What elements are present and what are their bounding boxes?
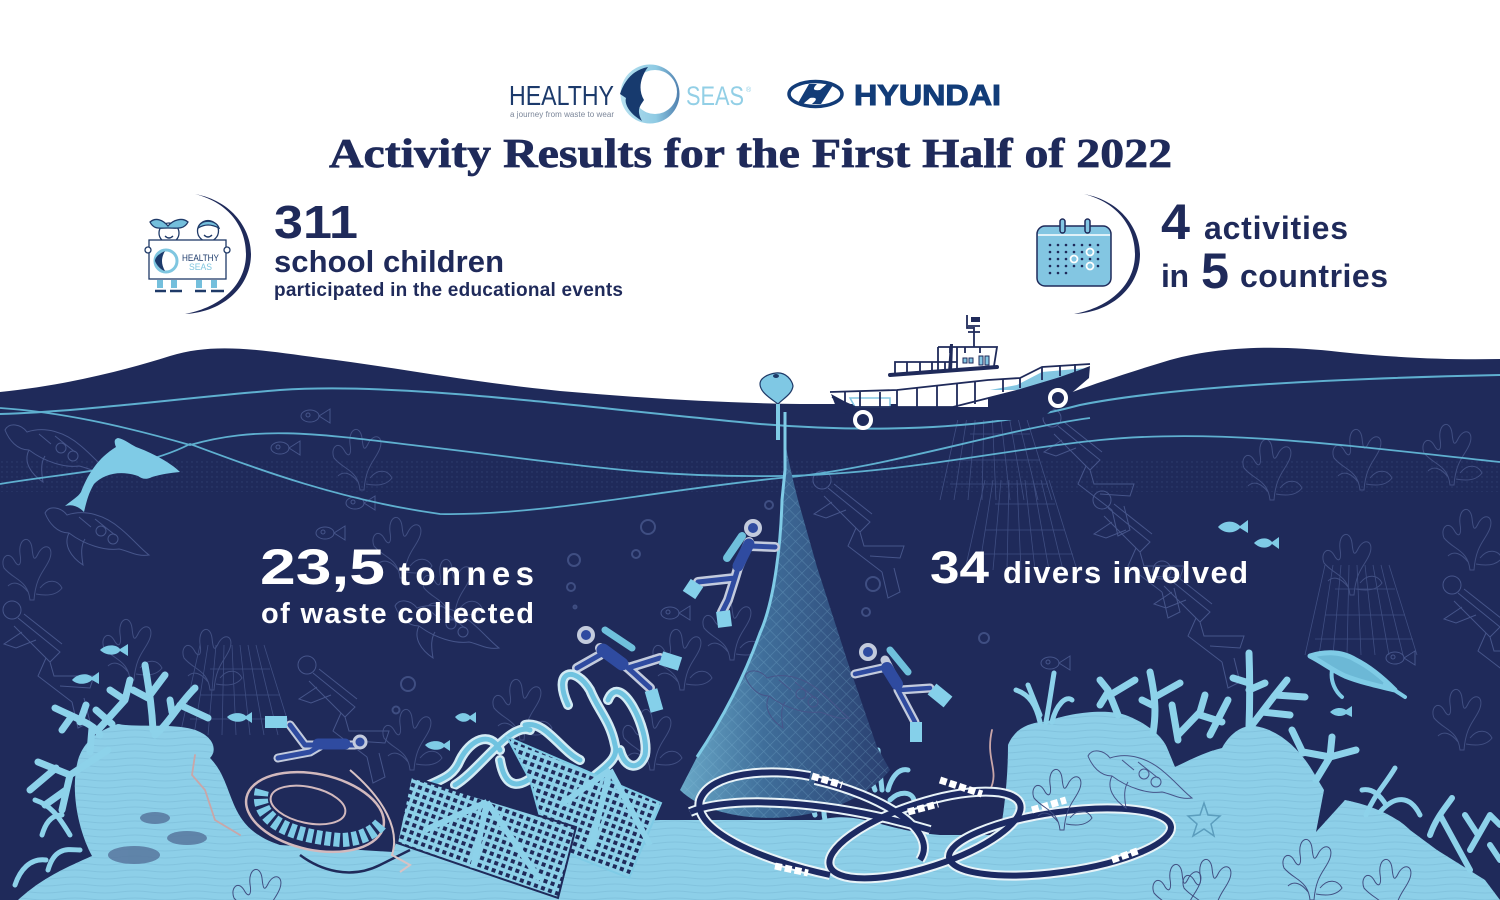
seabed	[18, 712, 1500, 900]
diver 1	[689, 521, 775, 627]
bubbles	[392, 501, 989, 714]
stat: 4 activities: 4	[1161, 194, 1190, 250]
net	[680, 412, 890, 818]
trap 2	[507, 737, 661, 878]
logo: Hyundai: HYUNDAI	[854, 80, 1001, 112]
panel: activities	[1037, 194, 1388, 314]
icon: crescent left	[185, 194, 251, 314]
buoy	[760, 373, 793, 440]
crew figure	[948, 344, 953, 372]
stat: in 5 countries: in	[1161, 258, 1189, 294]
stat: tonnes of waste: tonnes	[399, 555, 534, 592]
logo: Healthy Seas: SEAS	[686, 81, 744, 111]
logo: Healthy Seas	[509, 64, 752, 124]
coral: left cluster	[15, 665, 208, 885]
ropes	[192, 674, 994, 835]
panel: school children	[145, 194, 623, 314]
rope loops	[690, 772, 1175, 896]
background line art	[3, 409, 1500, 783]
lost net ring	[236, 756, 410, 872]
logo: Healthy Seas: a journey from waste to wear	[510, 110, 614, 119]
panel: school children: HEALTHY	[182, 253, 219, 263]
coral: right cluster	[1016, 653, 1500, 870]
title: Activity Results for the First Half of 2022	[329, 130, 1172, 176]
logo: Hyundai	[789, 80, 1001, 112]
stat: tonnes of waste: of waste collected	[261, 598, 534, 630]
logo: Healthy Seas: ®	[746, 86, 752, 94]
stat: divers: 34	[930, 542, 989, 593]
stat: tonnes of waste: 23,5	[260, 539, 385, 595]
stat: in 5 countries	[1161, 243, 1388, 299]
stat: in 5 countries: 5	[1201, 243, 1229, 299]
diver 4	[265, 722, 366, 758]
stat: 4 activities	[1161, 194, 1348, 250]
diver 2	[577, 628, 680, 711]
wave lines	[0, 375, 1500, 514]
fish group	[72, 520, 1352, 751]
panel: school children: SEAS	[189, 262, 212, 272]
stat: in 5 countries: countries	[1240, 258, 1388, 294]
icon: children holding sign	[145, 219, 230, 291]
stat: tonnes of waste	[260, 539, 534, 630]
windows	[963, 356, 989, 365]
stat: 4 activities: activities	[1204, 210, 1348, 246]
logo: Healthy Seas: HEALTHY	[509, 80, 614, 111]
rails	[830, 315, 1090, 407]
cabin	[897, 347, 995, 407]
net body	[680, 440, 890, 818]
stat: divers	[930, 542, 1248, 593]
foredeck	[990, 368, 1087, 390]
lifebuoys	[855, 412, 871, 428]
stern deck	[850, 398, 890, 407]
crab cluster	[108, 812, 207, 864]
ocean	[0, 348, 1500, 900]
radar	[971, 317, 980, 322]
icon: crescent right	[1074, 194, 1140, 314]
icon: turtle	[1310, 653, 1405, 697]
stat: divers: divers involved	[1003, 555, 1248, 590]
text: participated: participated in the educational events	[274, 280, 623, 301]
sand ripples	[18, 712, 1500, 900]
icon: starfish	[1188, 803, 1220, 836]
icon: calendar	[1037, 219, 1111, 286]
hull	[831, 366, 1090, 420]
roof deck	[890, 367, 997, 375]
dotted water band	[0, 460, 1500, 492]
coral: central tufts	[800, 750, 914, 820]
text: school children: school children	[274, 244, 504, 279]
net edge	[697, 412, 785, 757]
trap 1	[397, 777, 576, 898]
ghost coral on sand	[233, 751, 1422, 900]
stat: 311: 311	[274, 196, 358, 248]
ghost turtle on net	[745, 671, 849, 728]
diver 3	[855, 645, 948, 742]
boat	[830, 315, 1090, 428]
icon: dolphin	[65, 438, 180, 512]
trap frame	[425, 770, 650, 880]
